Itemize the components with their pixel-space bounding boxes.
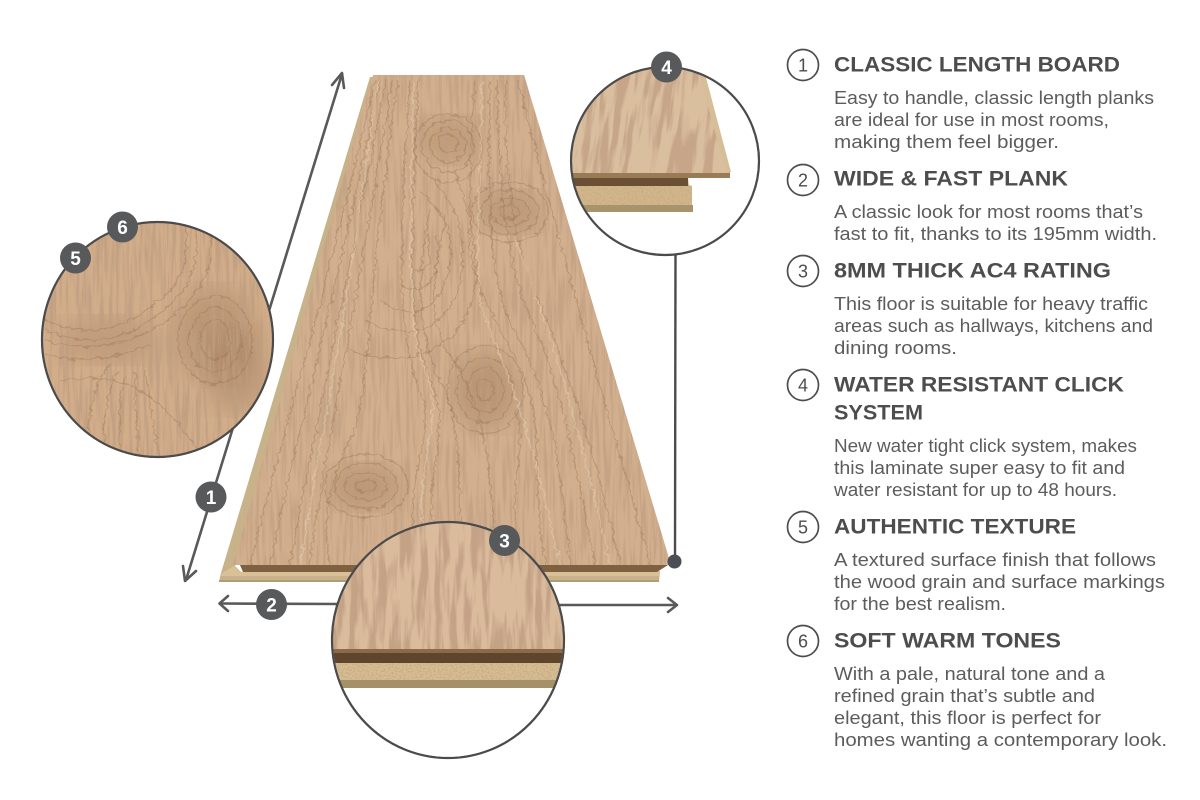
number 2	[788, 164, 818, 196]
number 6	[788, 626, 818, 656]
heading 5: AUTHENTIC TEXTURE	[834, 516, 1076, 538]
number 1	[788, 50, 818, 80]
body 1: are ideal for use in most rooms,	[834, 110, 1109, 130]
cathedral around central knots	[380, 190, 450, 312]
body 6: homes wanting a contemporary look.	[834, 730, 1167, 750]
body 3: areas such as hallways, kitchens and	[834, 316, 1153, 336]
heading 4: WATER RESISTANT CLICK	[834, 374, 1124, 396]
badge 6	[107, 212, 138, 242]
body 6: With a pale, natural tone and a	[834, 664, 1106, 684]
heading 1: CLASSIC LENGTH BOARD	[834, 54, 1120, 76]
feature 6: soft warm tones	[788, 626, 1167, 750]
number 4: 4	[798, 376, 808, 396]
detail circle: click system	[570, 67, 760, 256]
body 6: elegant, this floor is perfect for	[834, 708, 1101, 728]
arrow: board width	[220, 596, 677, 612]
heading 3: 8MM THICK AC4 RATING	[834, 260, 1111, 282]
badge 1	[196, 482, 226, 512]
body 3	[834, 294, 1153, 358]
badge 1: 1	[206, 488, 217, 509]
body 1	[834, 88, 1154, 152]
arrow: board length	[183, 73, 344, 581]
badge 2	[256, 589, 287, 620]
badge 3: 3	[499, 532, 510, 552]
plank wood surface	[220, 70, 680, 570]
number 6: 6	[798, 632, 808, 652]
number 5	[788, 512, 818, 542]
body 6	[834, 664, 1167, 750]
detail circle: surface texture	[40, 220, 276, 460]
wood top surface	[330, 520, 566, 650]
wood grain lines	[250, 80, 650, 565]
feature 3: thickness and rating	[788, 256, 1153, 358]
body 5: the wood grain and surface markings	[834, 572, 1165, 592]
heading 6: SOFT WARM TONES	[834, 630, 1061, 652]
detail circle: thickness cross-section	[330, 520, 566, 758]
body 2	[834, 202, 1157, 244]
feature 1: classic length board	[788, 50, 1154, 152]
feature 2: wide and fast plank	[788, 164, 1157, 244]
knot rings	[414, 114, 482, 182]
body 3: This floor is suitable for heavy traffic	[834, 294, 1148, 314]
heading 4	[834, 374, 1124, 424]
body 2: fast to fit, thanks to its 195mm width.	[834, 224, 1157, 244]
plank	[219, 70, 680, 582]
heading 2: WIDE & FAST PLANK	[834, 168, 1068, 190]
badge 4: 4	[661, 58, 672, 79]
number 2: 2	[798, 170, 808, 190]
number 3	[788, 256, 818, 286]
body 5: for the best realism.	[834, 594, 1006, 614]
badge 5: 5	[70, 249, 81, 270]
body 4	[833, 436, 1137, 500]
number 5: 5	[798, 518, 808, 538]
feature 4: water resistant click system	[788, 370, 1137, 500]
heading 4: SYSTEM	[834, 402, 923, 424]
body 3: dining rooms.	[834, 338, 957, 358]
body 1: making them feel bigger.	[834, 132, 1059, 152]
number 1: 1	[798, 56, 808, 76]
badge 6: 6	[117, 218, 128, 239]
body 4: water resistant for up to 48 hours.	[833, 480, 1117, 500]
number 4	[788, 370, 818, 400]
badge 5	[60, 242, 91, 274]
badge 4	[651, 52, 682, 82]
body 5	[834, 550, 1165, 614]
body 4: this laminate super easy to fit and	[834, 458, 1125, 478]
number 3: 3	[798, 262, 808, 282]
badge 2: 2	[266, 596, 277, 616]
leader line to detail 4	[668, 250, 682, 568]
plank side and tongue edge	[219, 75, 671, 582]
body 5: A textured surface finish that follows	[834, 550, 1156, 570]
core layers	[330, 649, 566, 653]
body 2: A classic look for most rooms that’s	[834, 202, 1143, 222]
body 6: refined grain that’s subtle and	[834, 686, 1095, 706]
body 4: New water tight click system, makes	[834, 436, 1137, 456]
feature 5: authentic texture	[788, 512, 1165, 614]
body 1: Easy to handle, classic length planks	[834, 88, 1154, 108]
badge 3	[489, 525, 520, 556]
